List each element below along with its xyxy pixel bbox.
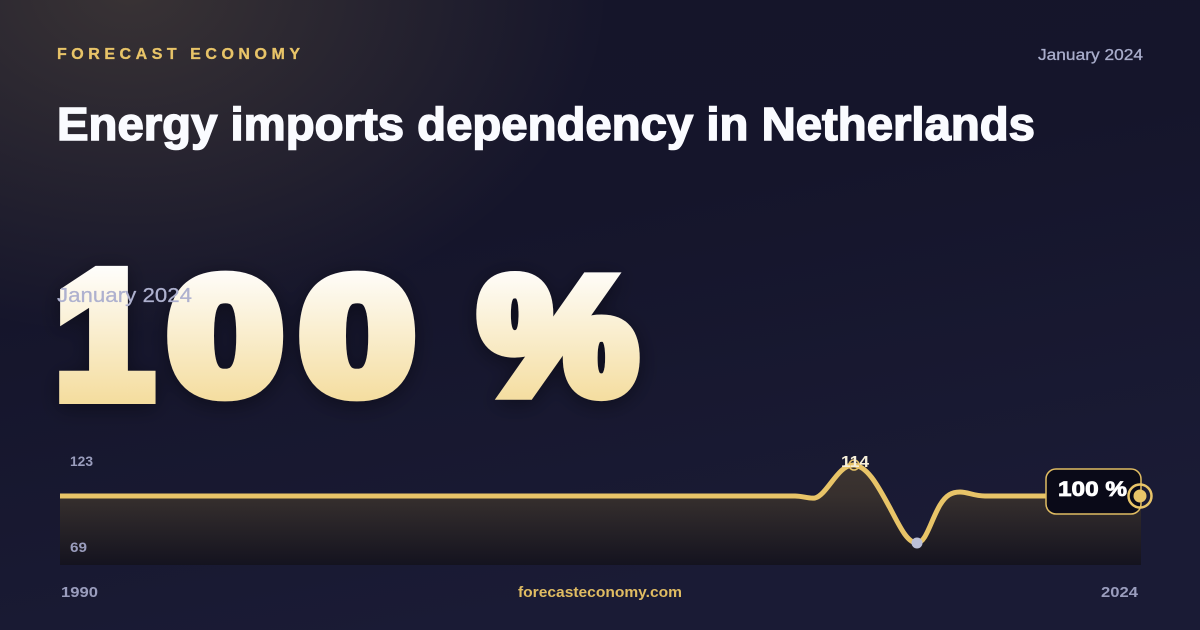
- brand label: FORECAST ECONOMY: [57, 46, 300, 63]
- chart line: [60, 465, 1140, 543]
- big value: 1: [56, 235, 153, 435]
- date overlapping value: January 2024: [57, 285, 192, 307]
- date top right: January 2024: [1038, 47, 1143, 64]
- start year: 1990: [61, 585, 98, 601]
- big value: [56, 235, 636, 435]
- minimum marker: [912, 538, 922, 548]
- axis label max: 123: [70, 453, 93, 469]
- current value callout: [1046, 469, 1141, 514]
- maximum marker: [849, 460, 859, 470]
- chart area fill: [60, 465, 1141, 565]
- big value: 00: [168, 245, 414, 428]
- end year: 2024: [1101, 585, 1138, 601]
- line chart: [60, 453, 1141, 565]
- current value marker: [1128, 484, 1152, 508]
- current value callout: 100 %: [1058, 478, 1127, 501]
- maximum label: 114: [841, 454, 869, 471]
- source url: forecasteconomy.com: [518, 584, 682, 601]
- title: Energy imports dependency in Netherlands: [57, 98, 1035, 150]
- axis label min: 69: [70, 539, 87, 555]
- big value: %: [480, 244, 636, 427]
